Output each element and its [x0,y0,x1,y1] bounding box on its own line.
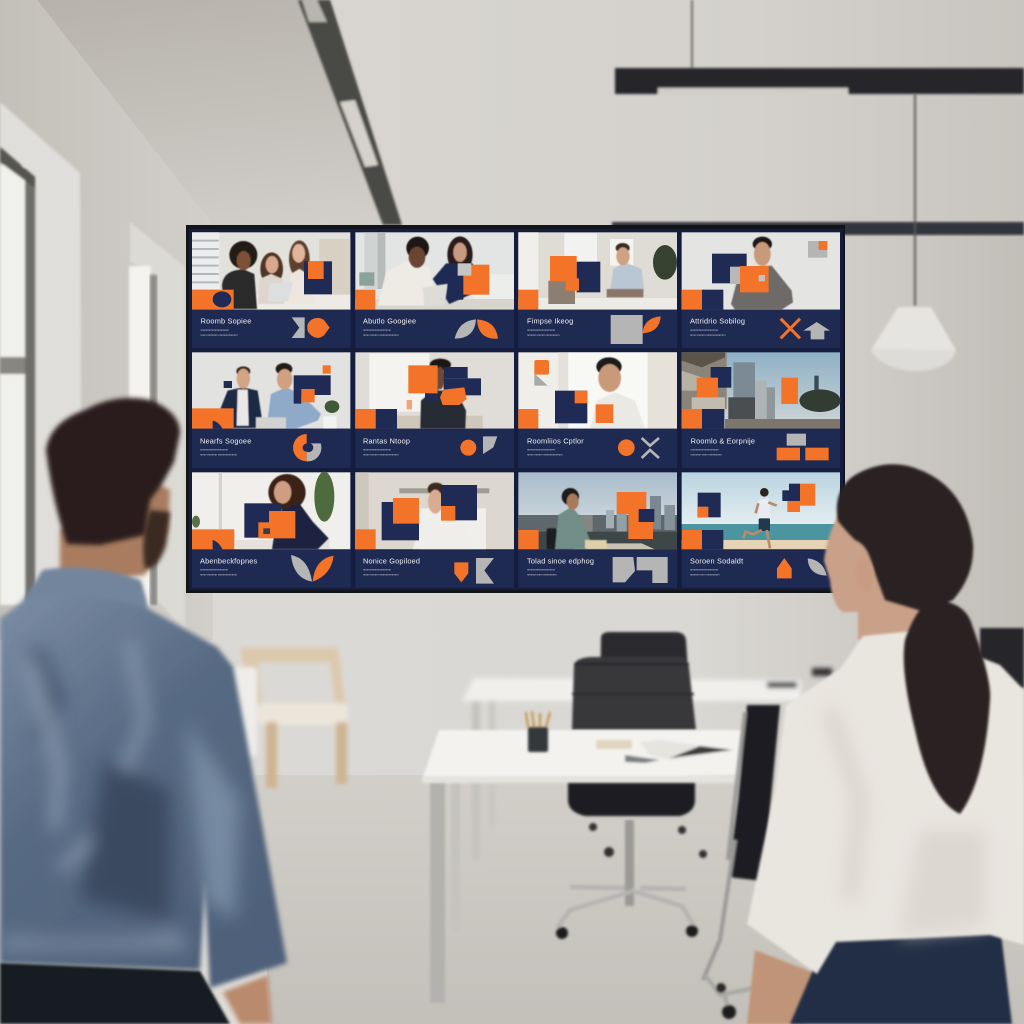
panel 10: nnnnnnnnnnnnnnnnnnn [363,569,392,572]
person [413,483,474,549]
person [731,237,793,310]
side chair [703,628,1024,1019]
office chair [556,632,707,939]
window near [0,147,35,605]
woman hair [837,464,990,814]
floor [255,775,1024,1024]
person [590,357,645,429]
ceiling light track [298,0,402,225]
panel 8: Roomlo & Eorpnije [691,436,755,445]
person [547,488,607,549]
panel 6 [355,352,514,468]
man viewer [0,398,287,1024]
panel 7 [518,352,677,468]
man beard [143,510,170,569]
panel 11: Tolad sinoe edphog [527,557,594,566]
runner [743,488,777,548]
panel 8: nnnnnnnnnnnnnnnnnnn [691,448,719,451]
panel 3: nnnnnnnnnnnnnnnnnnn [527,329,556,332]
panel 6: nnnnnnnnnnnnnnnnnnn [363,448,392,451]
panel 4 [682,232,840,348]
panel 9: Abenbeckfopnes [200,557,258,566]
panel 1: Roomb Sopiee [201,316,252,325]
shirt folds [0,640,240,950]
panel 4: Attridrio Sobilog [690,316,745,325]
panel 8 [682,352,841,468]
wooden chair [233,648,348,788]
panel 4: nnnnnnnnnnnnnnnnnnn [690,329,719,332]
panel 5: nnnn nnnnnnn nnnnnnnnnnnnn [200,453,237,456]
front desk [422,730,742,1003]
woman jeans [790,925,1012,1024]
panel 9: nnnn nnnnnnn nnnnnnnnnnnnn [200,574,237,577]
panel 9 [192,472,351,588]
man neck and face side [60,480,170,585]
shirt collar [25,569,147,608]
panel 12: nnnnnnnnnnnnnnnnnnn [690,569,719,572]
panel 12: nnnnnn nnnn nnnnnnnnn [690,574,720,577]
man hand [223,975,272,1024]
pendant lamp [871,94,956,371]
panel 1: nnnn nnnnnnn nnnnnnnnnnnnn [201,334,238,337]
man hair [46,398,180,545]
panel 2: nnnnnnnnnnnnnnnnnnn [363,329,392,332]
screen navy surface [189,229,843,590]
woman skin [747,515,925,1024]
panel 11: nnnnnn nnnn nnnnnnnnn [527,574,557,577]
book and papers [640,740,735,760]
panel 10: nnnn nnnnnn nnnnnnnnnnnnn [363,574,399,577]
far track [612,222,1024,235]
panel 3: Fimpse Ikeog [527,316,573,325]
panel 7: nnnn nnnnnn nnnnnnnnnnnnn [527,453,563,456]
pendant bar light [615,0,1024,94]
man trousers [0,963,230,1024]
people [221,363,321,429]
panel 3: nnnnnn nnnnnn nnnnnnnnn [527,334,560,337]
panel 9: nnnnnnnnnnnnnnnnnnn [200,569,229,572]
panel 11: nnnnnnnnnnnnnnnnnnn [527,569,556,572]
pencil cup [526,711,550,752]
woman blouse [747,631,1024,974]
panel 11 [518,472,677,588]
people [222,240,316,309]
man shirt [0,569,287,988]
left wall [0,0,213,640]
panel 2 [355,232,514,348]
panel 1: nnnnnnnnnnnnnnnnnnn [201,329,229,332]
person [420,359,466,429]
panel 5 [192,352,351,468]
panel 3 [518,232,677,348]
panel 1 [192,232,351,348]
ceiling [37,0,1024,228]
panel 4: nnnn nnnnnn nnnnnnnnnnnnn [690,334,726,337]
plant [323,400,339,429]
panel 12 [682,472,840,588]
panel 8: nnnnnnn nnnn nnnnnnnnn [691,453,722,456]
panel 5: nnnnnnnnnnnnnnnnnnn [200,448,229,451]
woman viewer [747,464,1024,1024]
panel 12: Soroen Sodaldt [690,557,743,566]
window recess far [130,222,185,630]
panel 7: nnnnnnnnnnnnnnnnnnn [527,448,556,451]
people [378,236,479,306]
panel 10 [355,472,514,588]
panel 6: Rantas Ntoop [363,436,410,445]
person [268,474,329,549]
back table [462,668,832,861]
ceiling right side [330,0,1024,228]
window recess near [0,102,82,600]
panel 5: Nearfs Sogoee [200,436,251,445]
back wall [195,220,1024,790]
window far [129,266,151,606]
person [607,243,644,297]
panel 6: nnnn nnnnnn nnnnnnnnnnnnn [363,453,399,456]
woman ear [856,558,874,592]
panel 2: nnnn nnnnnn nnnnnnnnnnnnn [363,334,399,337]
blouse shading [830,710,985,935]
panel 7: Roomliios Cptlor [527,436,584,445]
panel 2: Abutlo Googiee [363,316,416,325]
panel 10: Nonice Gopiloed [363,557,420,566]
screen frame [186,225,845,593]
